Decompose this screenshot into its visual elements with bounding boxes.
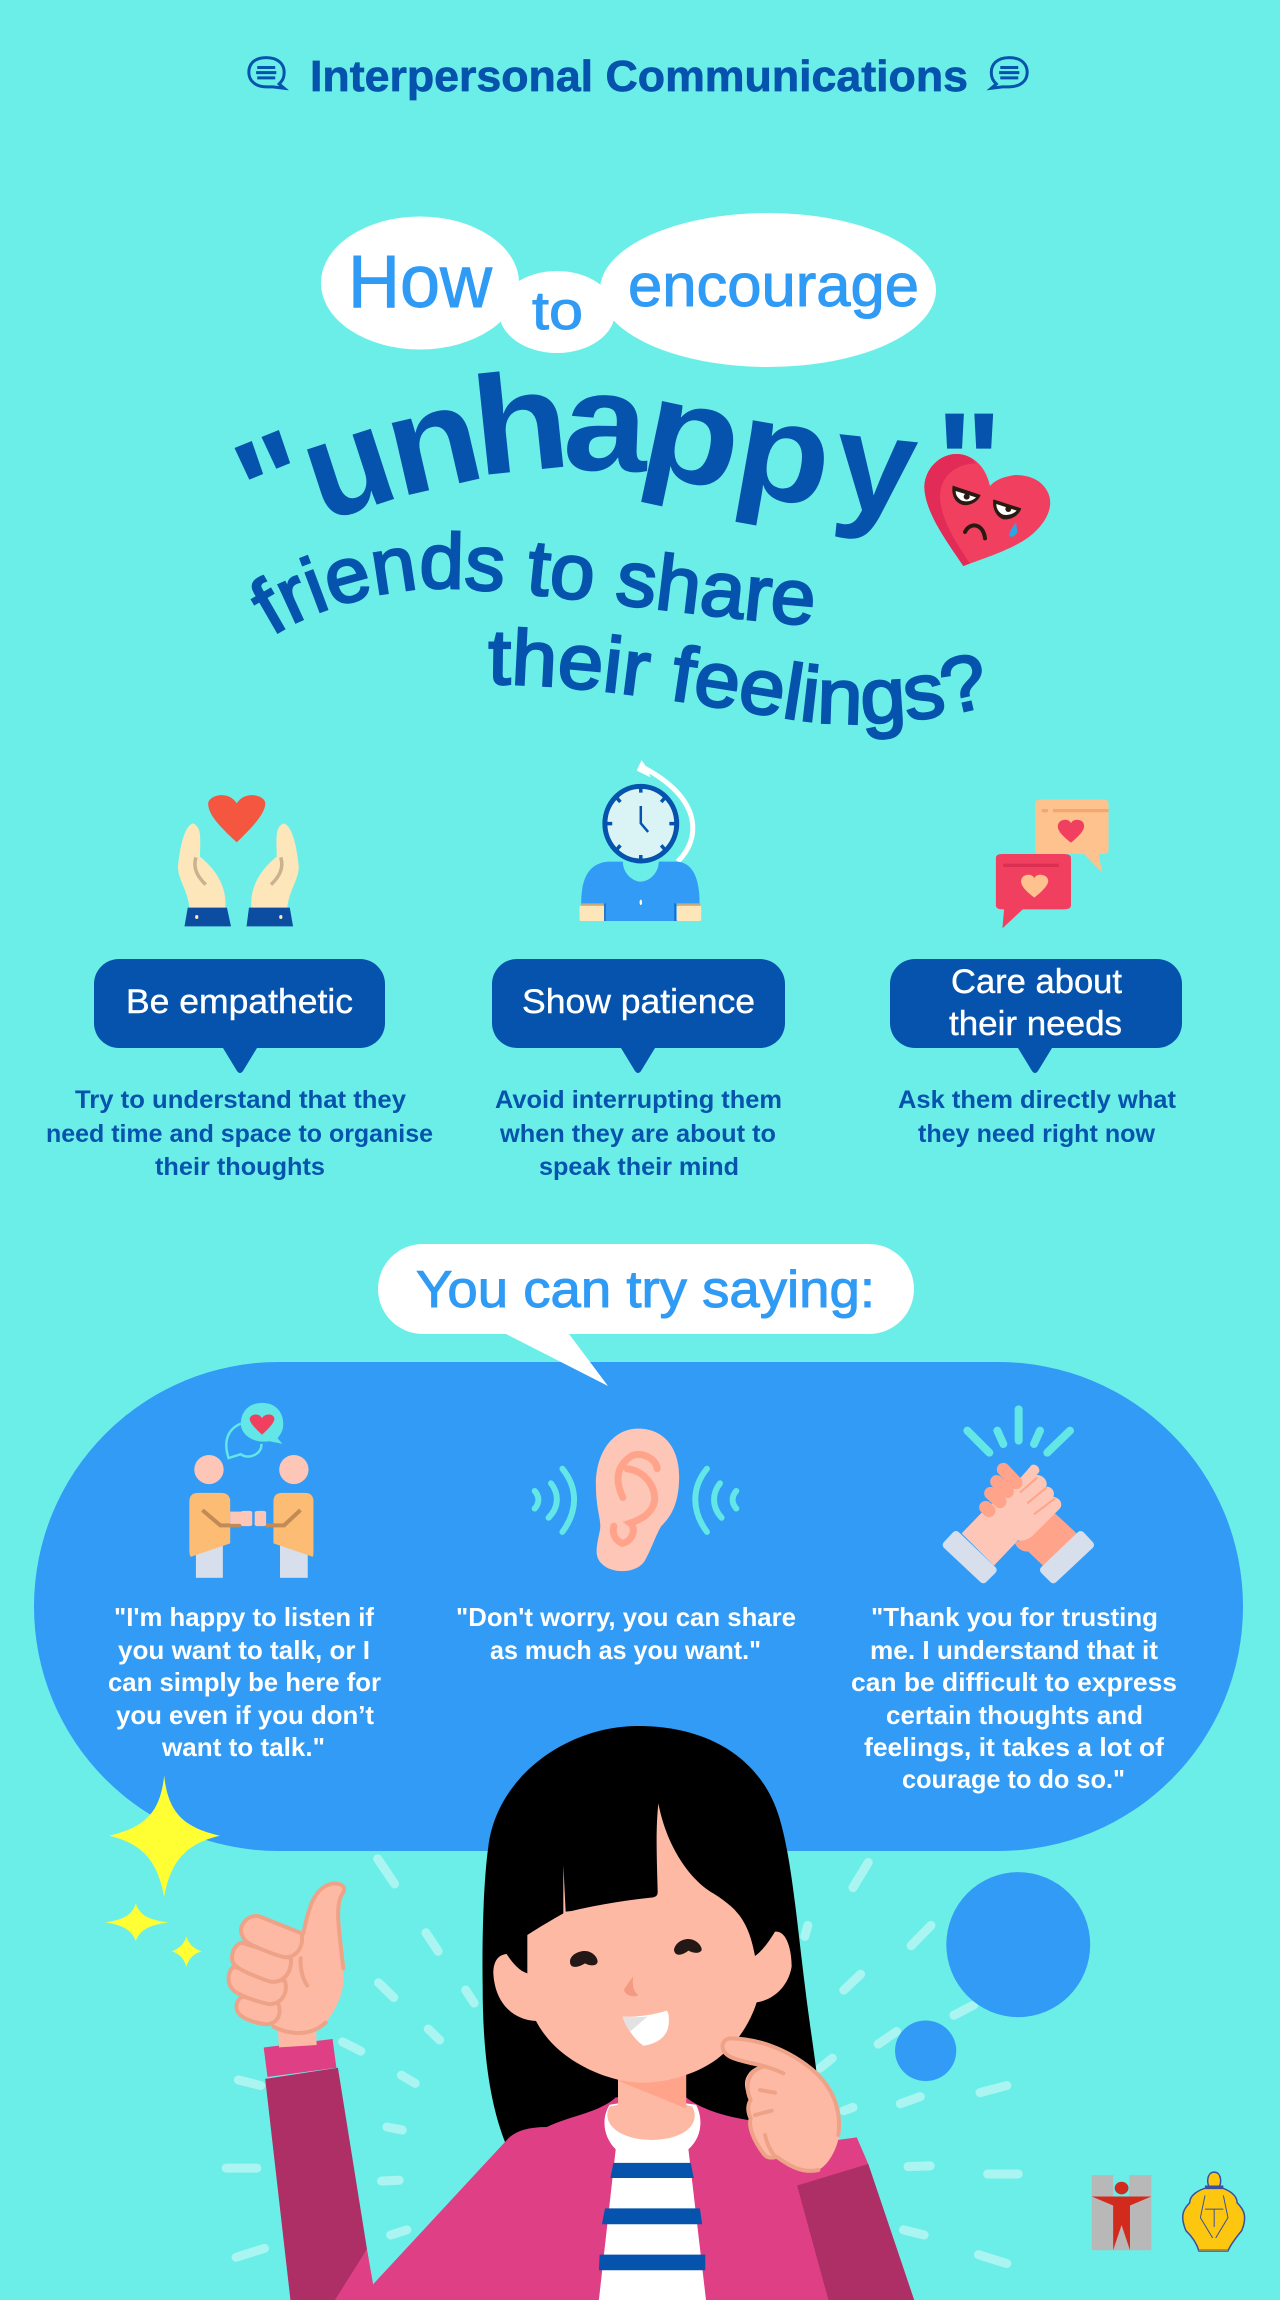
- text: patience description: when they are about to: [499, 1120, 776, 1148]
- left raised arm: [264, 2039, 367, 2300]
- word: How: How: [348, 240, 493, 323]
- text: quote three: can be difficult to express: [851, 1667, 1177, 1697]
- callout: Show patience: [492, 959, 785, 1073]
- text: quote three: "Thank you for trusting: [871, 1602, 1158, 1632]
- text: needs description: they need right now: [918, 1120, 1156, 1148]
- icon: ear with sound waves: [535, 1429, 736, 1571]
- text: patience description: [495, 1086, 782, 1181]
- text: quote one: "I'm happy to listen if: [114, 1602, 374, 1632]
- headline: "unhappy" curved: p: [630, 348, 756, 521]
- headline: their feelings?: their feelings?: [488, 626, 982, 740]
- icon: two heart messages: [996, 799, 1109, 928]
- decoration: yellow sparkles: [105, 1776, 220, 1967]
- headline: "unhappy" curved: a: [561, 342, 651, 502]
- right sleeve: [797, 2164, 914, 2300]
- icon: two people fist bump with heart bubble: [189, 1403, 313, 1578]
- neck: [607, 2073, 695, 2140]
- headline: friends to share: friends to share: [250, 530, 813, 634]
- shirt with stripes: [599, 2103, 706, 2300]
- panel: blue pill with sample phrases: [34, 1362, 1243, 1851]
- illustration: smiling girl giving thumbs up: [229, 1726, 914, 2300]
- text: patience description: Avoid interrupting them: [495, 1086, 782, 1114]
- jacket torso: [333, 2097, 914, 2300]
- logo: grey and red figure: [1092, 2175, 1151, 2250]
- panel: show patience: [492, 760, 785, 1181]
- text: quote three: me. I understand that it: [870, 1635, 1158, 1665]
- text: quote one: can simply be here for: [108, 1667, 381, 1697]
- headline: "unhappy" curved: u: [282, 375, 412, 551]
- panel: care about their needs: [890, 799, 1182, 1148]
- text: quote one: you even if you don’t: [116, 1700, 374, 1730]
- eyes: [570, 1939, 702, 1967]
- text: quote three: feelings, it takes a lot of: [864, 1732, 1164, 1762]
- word: encourage: encourage: [628, 252, 919, 319]
- headline: "unhappy" curved: [214, 340, 1002, 569]
- headline: How to encourage: [321, 213, 936, 367]
- face: [493, 1803, 792, 2083]
- text: needs description: Ask them directly what: [898, 1086, 1177, 1114]
- pointing hand: [722, 2038, 840, 2171]
- callout: Care about their needs: Care about: [951, 963, 1123, 1001]
- text: quote three: [851, 1602, 1177, 1794]
- quote column: listening friends: [108, 1403, 381, 1762]
- icon: hands holding heart: [178, 795, 299, 926]
- headline: "unhappy" curved: n: [370, 353, 495, 526]
- text: quote one: [108, 1602, 381, 1762]
- nose: [624, 1976, 638, 1996]
- text: quote two: as much as you want.": [490, 1635, 761, 1665]
- text: patience description: speak their mind: [539, 1153, 739, 1181]
- hair: [482, 1726, 817, 2153]
- callout: Show patience: Show patience: [522, 983, 755, 1021]
- callout: You can try saying: [378, 1244, 914, 1386]
- text: quote one: you want to talk, or I: [118, 1635, 370, 1665]
- callout: Care about their needs: [890, 959, 1182, 1073]
- callout: Be empathetic: Be empathetic: [126, 983, 353, 1021]
- icon: clasped hands with rays: [947, 1409, 1090, 1579]
- text: quote two: "Don't worry, you can share: [456, 1602, 796, 1632]
- text: quote three: courage to do so.": [902, 1764, 1125, 1794]
- icon: clock-headed person: [580, 760, 701, 921]
- text: quote three: certain thoughts and: [886, 1700, 1143, 1730]
- header: Interpersonal Communications: [249, 52, 1027, 101]
- smile: [622, 2011, 669, 2046]
- word: to: to: [532, 281, 583, 341]
- headline: "unhappy" curved: h: [465, 340, 576, 506]
- text: quote one: want to talk.": [161, 1732, 325, 1762]
- callout: You can try saying: You can try saying:: [416, 1261, 875, 1319]
- white cloud bubbles: [321, 213, 936, 367]
- text: quote two: [456, 1602, 796, 1665]
- title text: Interpersonal Communications: [310, 52, 968, 101]
- logo: golden praying hands: [1183, 2172, 1245, 2251]
- quote column: thanks: [851, 1409, 1177, 1794]
- text: empathetic description: Try to understand that they: [75, 1086, 406, 1114]
- icon: right chat bubble: [991, 58, 1027, 88]
- icon: left chat bubble: [249, 58, 284, 88]
- headline: "unhappy" curved: ": [214, 398, 335, 569]
- text: empathetic description: their thoughts: [155, 1153, 325, 1181]
- callout: Be empathetic: [94, 959, 385, 1073]
- text: empathetic description: [46, 1086, 433, 1181]
- headline: "unhappy" curved: y: [827, 383, 924, 546]
- thumbs-up hand: [229, 1883, 344, 2047]
- panel: be empathetic: [46, 795, 433, 1181]
- icon: sad heart with tear: [924, 454, 1050, 566]
- quote column: ear: [456, 1429, 796, 1665]
- text: needs description: [898, 1086, 1177, 1148]
- decoration: blue circles: [895, 1872, 1090, 2081]
- headline: "unhappy" curved: ": [936, 383, 1002, 540]
- callout: Care about their needs: their needs: [949, 1005, 1122, 1043]
- headline: "unhappy" curved: p: [725, 368, 844, 538]
- text: empathetic description: need time and space to organise: [46, 1120, 433, 1148]
